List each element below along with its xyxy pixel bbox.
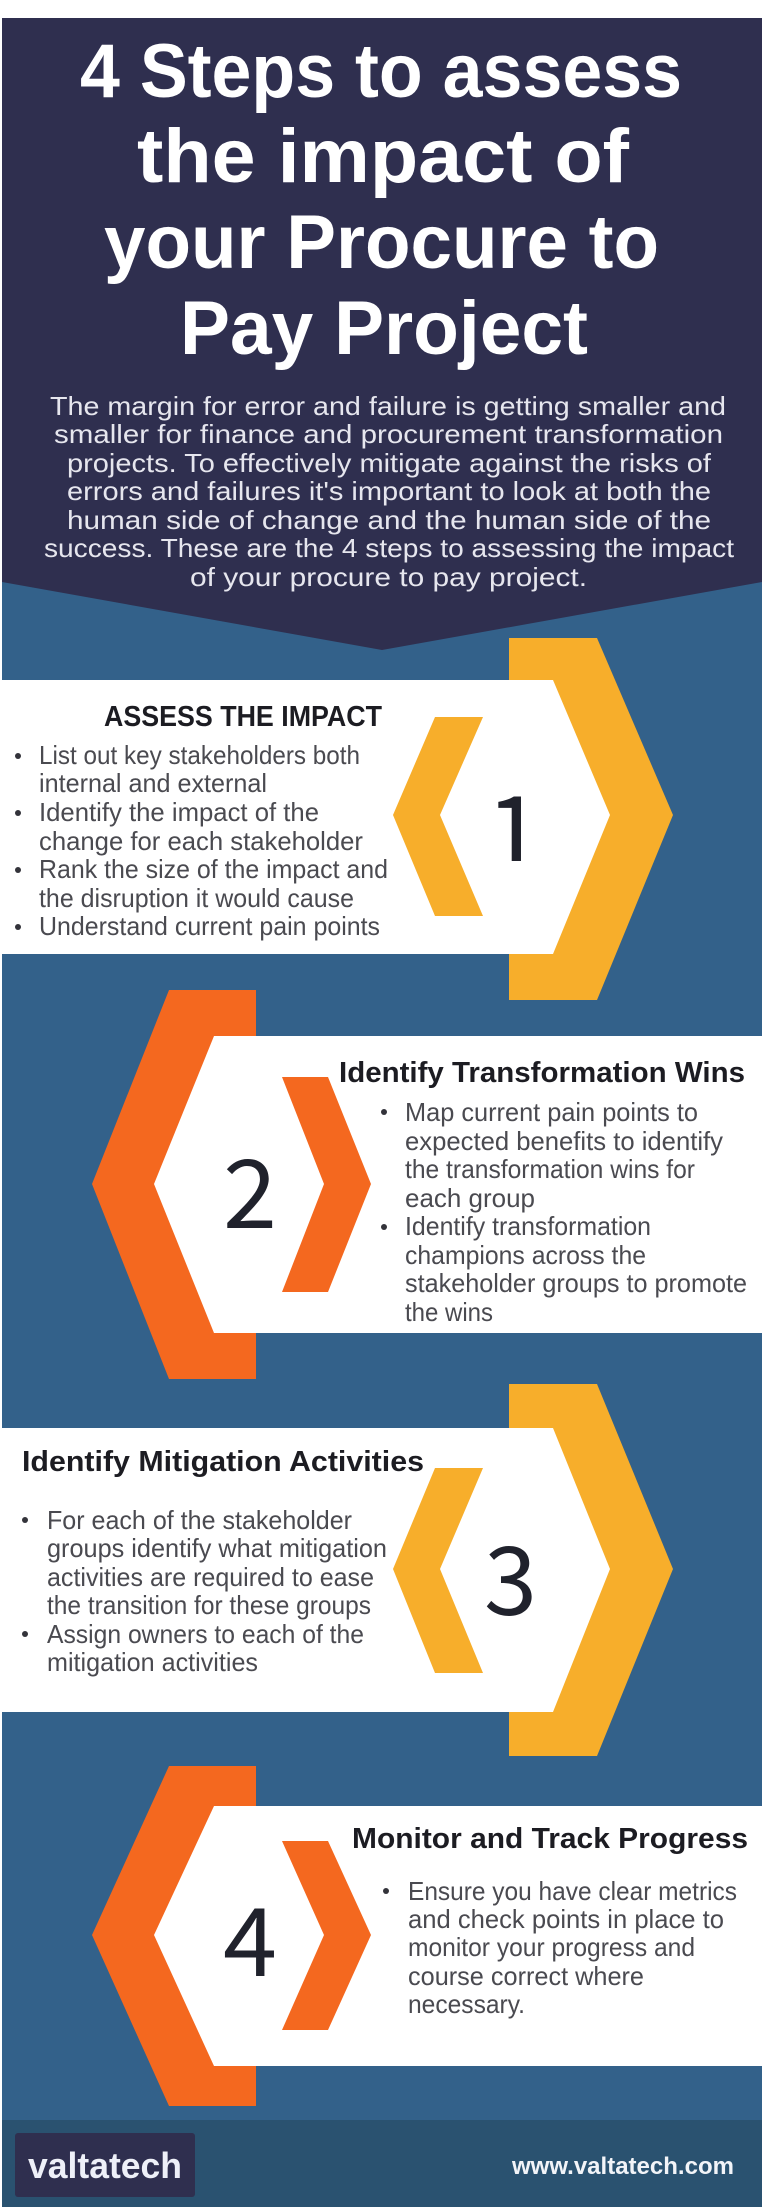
- number 3: 3: [484, 1506, 537, 1643]
- footer: [2, 2120, 762, 2207]
- bullet list 4: monitor your progress and: [408, 1932, 695, 1962]
- title: [80, 29, 682, 371]
- bullet list 2: champions across the: [405, 1240, 646, 1270]
- bullet list 3: groups identify what mitigation: [47, 1533, 387, 1563]
- white band 2: [154, 1036, 762, 1333]
- icon: orange inner chevron 4: [282, 1841, 371, 2030]
- bullet list 1: List out key stakeholders both: [39, 740, 360, 770]
- bullet list 4: Ensure you have clear metrics: [408, 1876, 737, 1906]
- title: the impact of: [137, 114, 630, 199]
- bullet list 4: course correct where: [408, 1961, 644, 1991]
- icon: orange outer chevron 4: [92, 1766, 256, 2106]
- intro paragraph: smaller for finance and procurement transformation: [54, 419, 723, 449]
- intro paragraph: projects. To effectively mitigate against the risks of: [67, 448, 712, 478]
- intro paragraph: human side of change and the human side of the: [67, 505, 711, 535]
- heading 1: ASSESS THE IMPACT: [104, 701, 382, 733]
- heading 4: Monitor and Track Progress: [352, 1823, 748, 1855]
- website url: www.valtatech.com: [511, 2153, 734, 2180]
- bullet list 2: the wins: [405, 1297, 493, 1327]
- panel: step 3 identify mitigation activities: [2, 1384, 673, 1756]
- panel: step 4 monitor and track progress: [92, 1766, 762, 2106]
- bullet list 1: the disruption it would cause: [39, 883, 354, 913]
- bullet list 1: change for each stakeholder: [39, 826, 363, 856]
- icon: orange outer chevron 2: [92, 990, 256, 1379]
- intro paragraph: of your procure to pay project.: [190, 562, 587, 592]
- number 2: 2: [223, 1119, 277, 1256]
- bullet list 4: and check points in place to: [408, 1904, 724, 1934]
- bullet list 1: Understand current pain points: [39, 911, 380, 941]
- bullet list 3: For each of the stakeholder: [47, 1505, 352, 1535]
- icon: yellow outer chevron 3: [509, 1384, 673, 1756]
- bullet list 1: Identify the impact of the: [39, 797, 319, 827]
- icon: yellow inner chevron 1: [393, 717, 483, 916]
- logo: valtatech: [28, 2145, 182, 2186]
- header panel: [2, 18, 762, 650]
- blue background: [2, 560, 762, 2207]
- icon: orange inner chevron 2: [282, 1077, 371, 1292]
- icon: yellow outer chevron 1: [509, 638, 673, 1000]
- bullet list 4: [383, 1876, 737, 2019]
- intro paragraph: success. These are the 4 steps to assessing the impact: [44, 533, 735, 563]
- title: 4 Steps to assess: [80, 29, 682, 114]
- title: Pay Project: [180, 286, 588, 371]
- bullet list 3: the transition for these groups: [47, 1590, 371, 1620]
- number 1: 1: [486, 752, 543, 899]
- bullet list 1: [15, 740, 388, 941]
- bullet list 1: Rank the size of the impact and: [39, 854, 388, 884]
- white band 3: [2, 1428, 610, 1712]
- white band 1: [2, 680, 610, 954]
- bullet list 2: expected benefits to identify: [405, 1126, 723, 1156]
- logo: [15, 2133, 195, 2197]
- bullet list 2: Identify transformation: [405, 1211, 651, 1241]
- bullet list 1: internal and external: [39, 768, 267, 798]
- bullet list 4: necessary.: [408, 1989, 525, 2019]
- bullet list 3: mitigation activities: [47, 1647, 258, 1677]
- intro paragraph: The margin for error and failure is getting smaller and: [50, 391, 726, 421]
- icon: yellow inner chevron 3: [393, 1468, 483, 1673]
- intro paragraph: [44, 391, 735, 592]
- bullet list 3: [22, 1505, 387, 1677]
- bullet list 2: Map current pain points to: [405, 1097, 698, 1127]
- intro paragraph: errors and failures it's important to look at both the: [67, 476, 711, 506]
- bullet list 2: [381, 1097, 747, 1327]
- bullet list 3: Assign owners to each of the: [47, 1619, 364, 1649]
- panel: step 1 assess the impact: [2, 638, 673, 1000]
- bullet list 2: each group: [405, 1183, 535, 1213]
- number 4: 4: [223, 1867, 277, 2004]
- bullet list 2: stakeholder groups to promote: [405, 1268, 747, 1298]
- white band 4: [154, 1806, 762, 2066]
- panel: step 2 identify transformation wins: [92, 990, 762, 1379]
- bullet list 3: activities are required to ease: [47, 1562, 374, 1592]
- title: your Procure to: [104, 200, 659, 285]
- heading 2: Identify Transformation Wins: [339, 1057, 745, 1089]
- bullet list 2: the transformation wins for: [405, 1154, 695, 1184]
- heading 3: Identify Mitigation Activities: [22, 1446, 424, 1478]
